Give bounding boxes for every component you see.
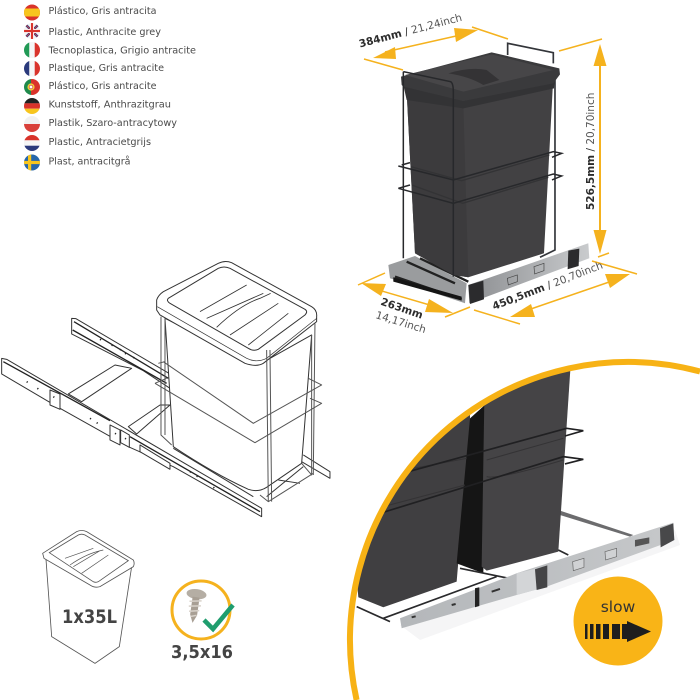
front rail xyxy=(2,358,262,517)
photo clipped to circle xyxy=(347,360,680,640)
slow arrow icon xyxy=(585,621,651,642)
badge disc xyxy=(574,576,662,666)
dimension arrow xyxy=(364,27,508,70)
label: Polish: Plastik, Szaro-antracytowy xyxy=(48,118,177,129)
dimension: depth 263mm xyxy=(358,273,470,336)
line drawing: bin on slide rails xyxy=(2,261,330,517)
capacity label: 1x35L xyxy=(62,606,117,628)
dimension label: 450,5mm / 20,70inch xyxy=(491,260,605,313)
dimension: width 384mm xyxy=(358,12,508,70)
rail base xyxy=(388,256,467,303)
bin body xyxy=(165,318,312,491)
label: Portuguese: Plástico, Gris antracite xyxy=(48,80,157,92)
screw size label: 3,5x16 xyxy=(171,643,233,663)
dimension label: 526,5mm / 20,70inch xyxy=(585,93,597,210)
flag: Spain xyxy=(24,4,40,20)
dimension label: 384mm / 21,24inch xyxy=(358,12,463,50)
bin rim band xyxy=(403,79,555,108)
dimension arrow xyxy=(358,273,470,317)
flag: Sweden xyxy=(24,154,40,170)
rear rail xyxy=(72,318,170,388)
label: German: Kunststoff, Anthrazitgrau xyxy=(48,100,171,110)
screw xyxy=(183,588,207,624)
rear wire frame xyxy=(508,43,555,257)
rear cross bar xyxy=(560,511,633,537)
icon: screw size 3,5x16 xyxy=(171,581,233,663)
badge text: slow xyxy=(601,598,636,616)
label: Italian: Tecnoplastica, Grigio antracite xyxy=(47,46,196,56)
label: French: Plastique, Gris antracite xyxy=(48,63,164,74)
shadow xyxy=(400,530,680,640)
label: Swedish: Plast, antracitgrå xyxy=(48,154,130,168)
yellow circle arc xyxy=(350,362,700,700)
dimension arrow xyxy=(559,39,609,257)
cross plates xyxy=(68,365,170,434)
label: Dutch: Plastic, Antracietgrijs xyxy=(48,137,151,148)
wire frame xyxy=(155,317,322,502)
dimension: height 526,5mm xyxy=(559,39,609,257)
yellow ring xyxy=(172,581,230,639)
circular detail: two bins on soft-close slide xyxy=(347,360,700,700)
badge: slow close xyxy=(574,576,662,666)
flag: Italy xyxy=(24,42,40,58)
bin outline xyxy=(43,530,134,663)
flag: Portugal xyxy=(24,79,40,95)
slide rail xyxy=(400,523,674,628)
rear frame base xyxy=(173,448,330,497)
flag: UK xyxy=(24,23,40,39)
flag: France xyxy=(24,60,40,76)
left bin xyxy=(358,415,470,608)
bin ribs xyxy=(383,438,563,507)
dimension: length 450,5mm xyxy=(474,260,637,324)
legend: material in nine languages xyxy=(24,4,196,170)
slide rail side xyxy=(468,243,589,303)
flag: Poland xyxy=(24,116,40,132)
gap between bins xyxy=(457,403,487,573)
label: English: Plastic, Anthracite grey xyxy=(48,27,161,38)
bin lid xyxy=(401,52,560,101)
photo: bin in wire frame on slide rails xyxy=(388,43,589,304)
dimension label: inches: 14,17inch xyxy=(374,309,427,336)
bin body xyxy=(407,77,553,277)
product photo with dimensions xyxy=(358,12,637,336)
green check mark xyxy=(204,605,233,629)
label: Spanish: Plástico, Gris antracita xyxy=(48,5,156,17)
dimension label: 263mm xyxy=(379,296,424,322)
wire frame xyxy=(398,72,562,277)
right bin xyxy=(482,360,571,571)
flag: Germany xyxy=(24,98,40,114)
dimension arrow xyxy=(474,261,637,324)
base wires xyxy=(357,550,568,622)
wire loops xyxy=(380,428,583,513)
flag: Netherlands xyxy=(24,135,40,151)
icon: bin, capacity 1x35L xyxy=(43,530,134,663)
bin lid xyxy=(157,261,317,365)
